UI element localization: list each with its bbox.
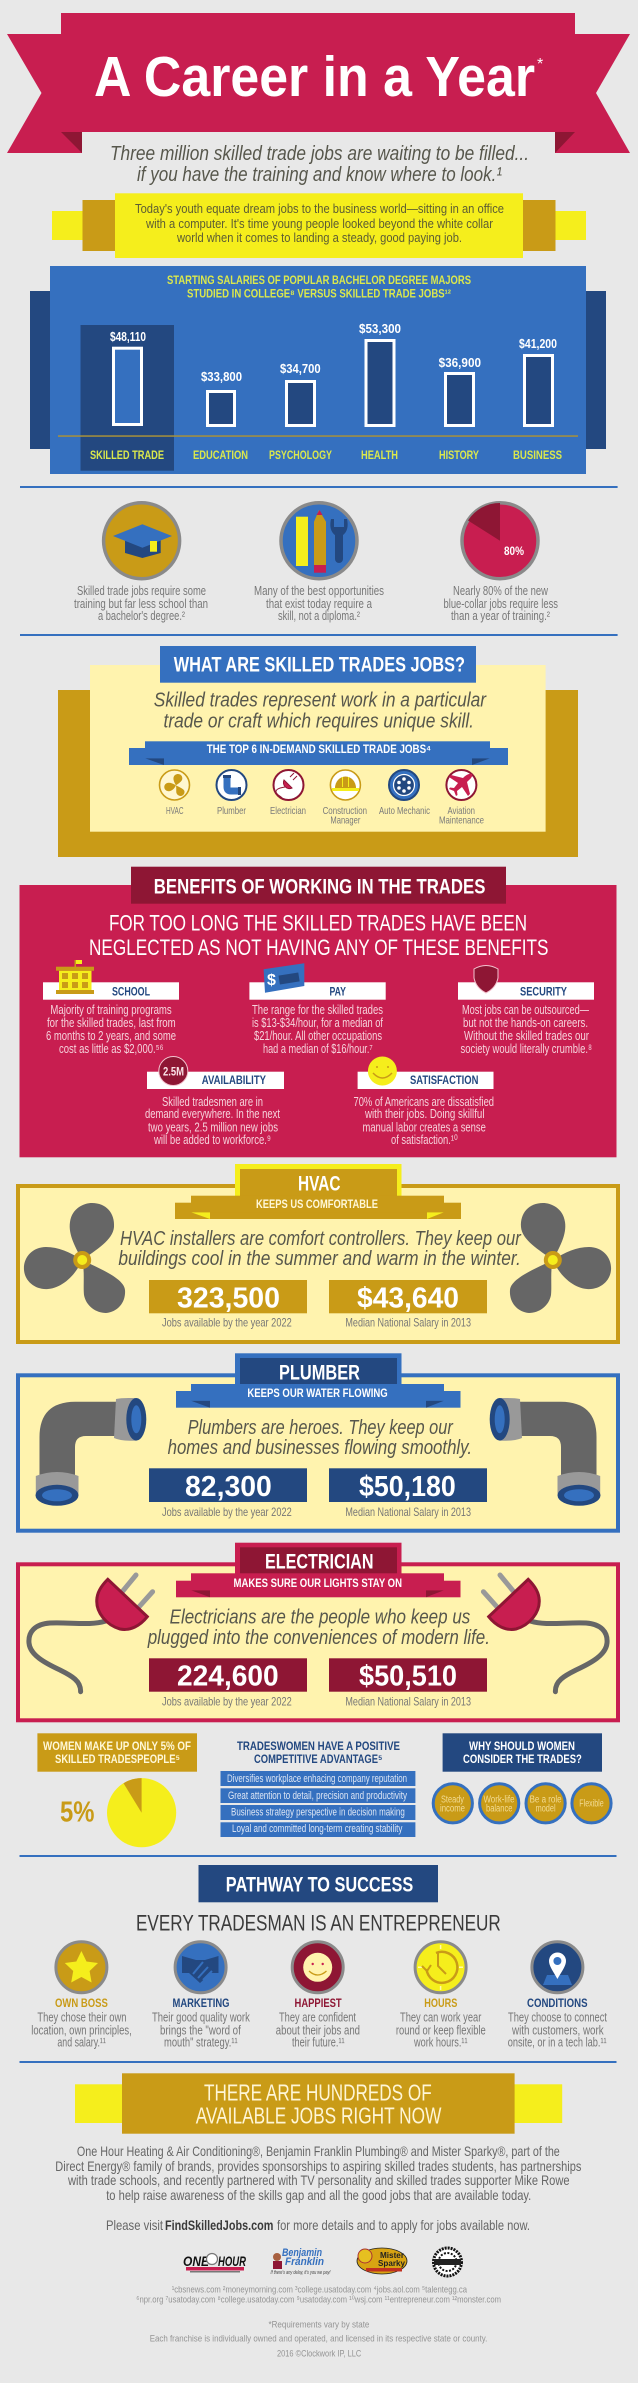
chart heading: STUDIED IN COLLEGE⁸ VERSUS SKILLED TRADE JOBS¹²	[187, 288, 451, 300]
logo: mister sparky	[357, 2248, 407, 2274]
call to action: FindSkilledJobs.com	[165, 2217, 273, 2233]
banner: hundreds of jobs	[75, 2073, 562, 2134]
pie chart: 80%: 80%	[504, 546, 524, 558]
school text: Majority of training programs	[50, 1002, 172, 1017]
stat: electrician jobs	[149, 1658, 307, 1709]
availability text	[145, 1094, 280, 1147]
benefit: pay	[249, 963, 386, 1056]
own boss text: location, own principles,	[31, 2023, 132, 2038]
plumber header: KEEPS OUR WATER FLOWING	[247, 1388, 388, 1400]
pathway: happiest: HAPPIEST	[294, 1996, 342, 2010]
icon: hvac	[160, 770, 190, 800]
stat: plumber salary: $50,180	[359, 1471, 456, 1503]
logo: mister sparky: Mister	[380, 2251, 404, 2260]
plumber description: Plumbers are heroes. They keep our	[188, 1416, 454, 1439]
caption: training: training but far less school than	[74, 596, 208, 611]
disclaimers: Each franchise is individually owned and operated, and licensed in its respective state or county.	[150, 2334, 487, 2345]
icon: map pin	[532, 1942, 583, 1993]
availability text: Skilled tradesmen are in	[162, 1094, 263, 1109]
disclaimers: 2016 ©Clockwork IP, LLC	[277, 2349, 361, 2360]
hvac description: HVAC installers are comfort controllers. They keep our	[120, 1227, 522, 1250]
stat: hvac jobs: Jobs available by the year 2022	[162, 1316, 292, 1330]
title: A Career in a Year	[94, 45, 535, 109]
icon labels: Construction	[323, 805, 367, 817]
icon: plug right	[483, 1575, 607, 1692]
conditions text: with customers, work	[511, 2023, 604, 2038]
women heading	[43, 1739, 191, 1766]
advantage list: Business strategy perspective in decision making	[231, 1807, 405, 1819]
bar values	[110, 322, 557, 384]
bar labels: HEALTH	[361, 450, 398, 462]
reason badges: Flexible	[579, 1799, 604, 1810]
subtitle: Three million skilled trade jobs are waiting to be filled...	[110, 142, 529, 165]
electrician description	[147, 1605, 490, 1649]
hvac description	[118, 1227, 522, 1270]
stat: hvac salary: Median National Salary in 2013	[345, 1316, 471, 1330]
caption: training	[74, 583, 208, 623]
icon labels: HVAC	[166, 805, 184, 817]
heading: pathway to success	[198, 1865, 438, 1902]
entrepreneur heading: EVERY TRADESMAN IS AN ENTREPRENEUR	[136, 1911, 501, 1936]
pay text: is $13-$34/hour, for a median of	[252, 1015, 383, 1030]
hvac description: buildings cool in the summer and warm in the winter.	[118, 1247, 521, 1270]
logo: benjamin franklin	[270, 2247, 331, 2276]
pathway: hours	[396, 1942, 486, 2050]
security text: but not the hands-on careers.	[463, 1015, 588, 1030]
electrician header: ELECTRICIAN	[265, 1551, 374, 1574]
intro text: with a computer. It's time young people looked beyond the white collar	[145, 216, 494, 231]
sponsor paragraph: to help raise awareness of the skills gap and all the good jobs that are available today.	[106, 2187, 531, 2203]
bar labels: SKILLED TRADE	[90, 450, 164, 462]
availability text: demand everywhere. In the next	[145, 1106, 280, 1121]
panel: electrician	[18, 1543, 618, 1720]
sponsor paragraph	[55, 2143, 581, 2203]
security text: Most jobs can be outsourced—	[462, 1002, 589, 1017]
icon labels: Electrician	[270, 805, 306, 817]
marketing text: mouth" strategy.¹¹	[164, 2035, 238, 2050]
happiest text: They are confident	[279, 2010, 356, 2025]
benefit: pay: PAY	[330, 984, 346, 998]
caption: blue-collar: Nearly 80% of the new	[453, 583, 548, 598]
stat: hvac jobs: 323,500	[177, 1282, 280, 1314]
logo: one hour: ONE	[183, 2253, 210, 2269]
hours text: They can work year	[400, 2010, 482, 2025]
satisfaction text: 70% of Americans are dissatisfied	[354, 1094, 494, 1109]
bar labels	[90, 450, 562, 462]
call to action: for more details and to apply for jobs available now.	[277, 2217, 530, 2233]
icon: tools	[281, 503, 357, 579]
icon: electrician	[274, 770, 304, 800]
hvac header: HVAC	[298, 1173, 340, 1196]
pay text: had a median of $16/hour.⁷	[263, 1041, 373, 1056]
benefit: availability	[145, 1056, 284, 1147]
caption: opportunities	[254, 583, 384, 623]
own boss text: and salary.¹¹	[57, 2035, 106, 2050]
conditions text	[508, 2010, 607, 2050]
stat: plumber jobs: 82,300	[185, 1471, 272, 1503]
panel: benefits	[20, 867, 616, 1157]
electrician description: plugged into the conveniences of modern life.	[147, 1626, 490, 1649]
stat: hvac jobs	[149, 1280, 307, 1330]
plumber description: homes and businesses flowing smoothly.	[168, 1436, 472, 1459]
pathway: conditions: CONDITIONS	[527, 1996, 588, 2010]
chart heading: STARTING SALARIES OF POPULAR BACHELOR DEGREE MAJORS	[167, 275, 471, 287]
pay text: $21/hour. All other occupations	[254, 1028, 382, 1043]
benefit: satisfaction	[354, 1056, 494, 1147]
reason badges: Steady	[441, 1795, 464, 1806]
logo: one hour	[183, 2253, 247, 2272]
pathway: hours: HOURS	[424, 1996, 457, 2010]
caption: blue-collar: blue-collar jobs require less	[444, 596, 558, 611]
own boss text: They chose their own	[37, 2010, 126, 2025]
icon: fan left	[24, 1203, 125, 1313]
benefit: school	[43, 960, 179, 1056]
electrician header: MAKES SURE OUR LIGHTS STAY ON	[234, 1578, 402, 1590]
disclaimers	[150, 2319, 487, 2360]
icon labels: Aviation	[448, 805, 475, 817]
plumber header: PLUMBER	[279, 1361, 360, 1384]
benefits statement: FOR TOO LONG THE SKILLED TRADES HAVE BEEN	[109, 911, 527, 936]
caption: training: Skilled trade jobs require some	[77, 583, 206, 598]
logo: mister sparky: Sparky	[378, 2259, 406, 2268]
heading	[131, 867, 506, 904]
icon: fan right	[510, 1203, 611, 1313]
happiest text: their future.¹¹	[292, 2035, 345, 2050]
bar labels: EDUCATION	[193, 450, 248, 462]
icon: handshake	[175, 1942, 226, 1993]
logo: benjamin franklin: Benjamin	[282, 2247, 322, 2259]
stat: plumber jobs	[149, 1468, 307, 1519]
yellow intro banner	[52, 193, 586, 258]
icon labels: Auto Mechanic	[379, 805, 430, 817]
top 6 ribbon: THE TOP 6 IN-DEMAND SKILLED TRADE JOBS⁴	[207, 744, 431, 756]
advantage heading: TRADESWOMEN HAVE A POSITIVE	[237, 1739, 400, 1753]
bar values: $53,300	[359, 322, 401, 336]
definition text: trade or craft which requires unique skill.	[164, 709, 474, 732]
hours text: work hours.¹¹	[413, 2035, 468, 2050]
reason badges: model	[536, 1804, 556, 1815]
advantage heading: COMPETITIVE ADVANTAGE⁵	[254, 1752, 382, 1766]
bar values: $33,800	[201, 370, 242, 384]
logo: clockwork seal	[434, 2248, 462, 2276]
security text	[460, 1002, 592, 1056]
satisfaction text: manual labor creates a sense	[362, 1119, 486, 1134]
icon labels	[166, 805, 484, 826]
subtitle	[110, 142, 529, 186]
satisfaction text: of satisfaction.¹⁰	[391, 1132, 458, 1147]
security text: society would literally crumble.⁸	[460, 1041, 592, 1056]
why heading: CONSIDER THE TRADES?	[463, 1752, 582, 1766]
title ribbon	[7, 13, 630, 153]
advantage heading	[237, 1739, 400, 1766]
stat: electrician jobs: 224,600	[177, 1661, 279, 1693]
icon labels: Manager	[330, 814, 361, 826]
own boss text	[31, 2010, 132, 2050]
bars	[114, 340, 552, 426]
bar labels: BUSINESS	[513, 450, 562, 462]
satisfaction text: with their jobs. Doing skillful	[364, 1106, 485, 1121]
bar labels: HISTORY	[439, 450, 479, 462]
stat: electrician salary: Median National Salary in 2013	[345, 1695, 471, 1709]
heading: WHAT ARE SKILLED TRADES JOBS?	[174, 654, 465, 677]
panel: competitive advantage	[220, 1739, 415, 1837]
stat: hvac salary: $43,640	[357, 1282, 459, 1314]
reason badges: income	[440, 1804, 465, 1815]
intro text: world when it comes to landing a steady, good paying job.	[176, 230, 462, 245]
pathway: marketing	[152, 1942, 250, 2050]
hours text	[396, 2010, 486, 2050]
marketing text	[152, 2010, 250, 2050]
icon: aviation	[446, 770, 476, 800]
happiest text	[276, 2010, 360, 2050]
icon: auto mechanic	[389, 770, 419, 800]
plumber header	[176, 1353, 460, 1408]
icon: pipe right	[490, 1398, 600, 1506]
reason badges: Be a role	[530, 1795, 562, 1806]
pathway: own boss	[31, 1942, 132, 2050]
icon labels: Maintenance	[439, 814, 484, 826]
advantage list	[220, 1771, 415, 1837]
source notes: ¹cbsnews.com ²moneymorning.com ³college.usatoday.com ⁴jobs.aol.com ⁵talentegg.ca	[172, 2285, 468, 2296]
plumber description	[168, 1416, 472, 1459]
marketing text: Their good quality work	[152, 2010, 250, 2025]
security text: Without the skilled trades our	[464, 1028, 589, 1043]
pathway: happiest	[276, 1942, 360, 2050]
reason badges: Work-life	[484, 1795, 515, 1806]
stat: plumber jobs: Jobs available by the year 2022	[162, 1505, 292, 1519]
pay text: The range for the skilled trades	[252, 1002, 383, 1017]
hvac header	[175, 1164, 461, 1219]
pie chart: 80%	[462, 503, 538, 579]
icon: smile	[292, 1942, 343, 1993]
happiest text: about their jobs and	[276, 2023, 360, 2038]
intro text: Today's youth equate dream jobs to the business world—sitting in an office	[135, 201, 504, 216]
availability text: two years, 2.5 million new jobs	[148, 1119, 278, 1134]
5% pie	[107, 1778, 176, 1847]
caption: training: a bachelor's degree.²	[98, 608, 185, 623]
benefit: school: SCHOOL	[112, 984, 150, 998]
5% value: 5%	[60, 1797, 95, 1829]
call to action	[106, 2217, 530, 2233]
icon: 2.5M badge: 2.5M	[163, 1064, 184, 1078]
pathway: conditions	[508, 1942, 607, 2050]
satisfaction text	[354, 1094, 494, 1147]
stat: plumber salary	[329, 1468, 487, 1519]
logo: benjamin franklin: Franklin	[285, 2256, 324, 2268]
advantage list: Diversifies workplace enhacing company reputation	[227, 1773, 407, 1785]
definition text: Skilled trades represent work in a particular	[154, 689, 487, 712]
title asterisk: *	[537, 56, 543, 73]
icon: construction	[330, 770, 360, 800]
icon labels: Plumber	[217, 805, 246, 817]
stat: electrician salary: $50,510	[359, 1661, 457, 1693]
bar values: $36,900	[439, 356, 481, 370]
intro text	[135, 201, 504, 245]
school text: 6 months to 2 years, and some	[46, 1028, 176, 1043]
benefit: security	[458, 966, 594, 1056]
banner: hundreds of jobs: THERE ARE HUNDREDS OF	[204, 2080, 432, 2106]
icon: banknote: $	[267, 972, 276, 989]
electrician header	[176, 1543, 460, 1597]
pathway: own boss: OWN BOSS	[55, 1996, 108, 2010]
benefits statement	[89, 911, 548, 960]
stat: electrician jobs: Jobs available by the year 2022	[162, 1695, 292, 1709]
benefit: satisfaction: SATISFACTION	[410, 1073, 478, 1087]
logo: benjamin franklin: If there's any delay, it's you we pay!	[270, 2270, 331, 2276]
icon: pipe left	[36, 1398, 146, 1506]
icon: plumber	[216, 770, 246, 800]
caption: opportunities: Many of the best opportunities	[254, 583, 384, 598]
definition text	[154, 689, 487, 732]
stat: electrician salary	[329, 1658, 487, 1709]
bar values: $41,200	[519, 337, 557, 351]
disclaimers: *Requirements vary by state	[268, 2319, 369, 2330]
caption: blue-collar	[444, 583, 558, 623]
banner: hundreds of jobs: AVAILABLE JOBS RIGHT NOW	[196, 2102, 442, 2128]
icon: shield	[474, 966, 498, 993]
pathway: marketing: MARKETING	[172, 1996, 230, 2010]
women heading: WOMEN MAKE UP ONLY 5% OF	[43, 1739, 191, 1753]
caption: opportunities: that exist today require a	[266, 596, 373, 611]
top 6 ribbon	[129, 741, 508, 765]
school text: cost as little as $2,000.⁵⁶	[59, 1041, 164, 1056]
panel: what are skilled trades jobs	[58, 646, 578, 857]
stat: hvac salary	[329, 1280, 487, 1330]
women heading: SKILLED TRADESPEOPLE⁵	[55, 1752, 180, 1766]
pay text	[252, 1002, 383, 1056]
why heading	[463, 1739, 582, 1766]
icon: plug left	[29, 1575, 153, 1692]
caption: opportunities: skill, not a diploma.²	[278, 608, 360, 623]
source notes	[136, 2285, 501, 2306]
bar values: $48,110	[110, 330, 146, 344]
marketing text: brings the "word of	[160, 2023, 241, 2038]
subtitle: if you have the training and know where to look.¹	[137, 163, 502, 186]
bar labels: PSYCHOLOGY	[269, 450, 332, 462]
hours text: round or keep flexible	[396, 2023, 486, 2038]
source notes: ⁶npr.org ⁷usatoday.com ⁸college.usatoday.com ⁹usatoday.com ¹⁰wsj.com ¹¹entrepreneur.com ¹²monster.com	[136, 2295, 501, 2306]
call to action: Please visit	[106, 2217, 163, 2233]
school text: for the skilled trades, last from	[47, 1015, 176, 1030]
panel: women share	[37, 1733, 197, 1847]
why heading: WHY SHOULD WOMEN	[469, 1739, 575, 1753]
panel: hvac	[18, 1164, 618, 1342]
availability text: will be added to workforce.⁹	[153, 1132, 271, 1147]
caption: blue-collar: than a year of training.²	[451, 608, 550, 623]
chart heading	[167, 275, 471, 300]
heading: BENEFITS OF WORKING IN THE TRADES	[154, 875, 485, 898]
stat: plumber salary: Median National Salary in 2013	[345, 1505, 471, 1519]
icon: graduation cap	[104, 503, 180, 579]
icon: smiley	[368, 1056, 397, 1086]
heading: pathway to success: PATHWAY TO SUCCESS	[226, 1874, 413, 1897]
icon: school building	[56, 960, 94, 994]
electrician description: Electricians are the people who keep us	[170, 1605, 470, 1628]
hvac header: KEEPS US COMFORTABLE	[256, 1199, 378, 1211]
reason badges	[433, 1784, 611, 1823]
advantage list: Loyal and committed long-term creating stability	[232, 1823, 403, 1835]
advantage list: Great attention to detail, precision and productivity	[228, 1790, 407, 1802]
panel: plumber	[18, 1353, 618, 1531]
icon: star	[56, 1942, 107, 1993]
benefit: availability: AVAILABILITY	[202, 1073, 266, 1087]
panel: starting salaries bar chart	[30, 266, 606, 474]
benefit: security: SECURITY	[520, 984, 567, 998]
reason badges: balance	[486, 1804, 513, 1815]
school text	[46, 1002, 176, 1056]
skilled trade highlight	[80, 325, 174, 471]
bar values: $34,700	[280, 362, 321, 376]
heading	[160, 646, 476, 683]
panel: why should women consider	[433, 1733, 611, 1823]
logo: one hour: HOUR	[218, 2253, 247, 2269]
icon: clock	[415, 1942, 466, 1993]
